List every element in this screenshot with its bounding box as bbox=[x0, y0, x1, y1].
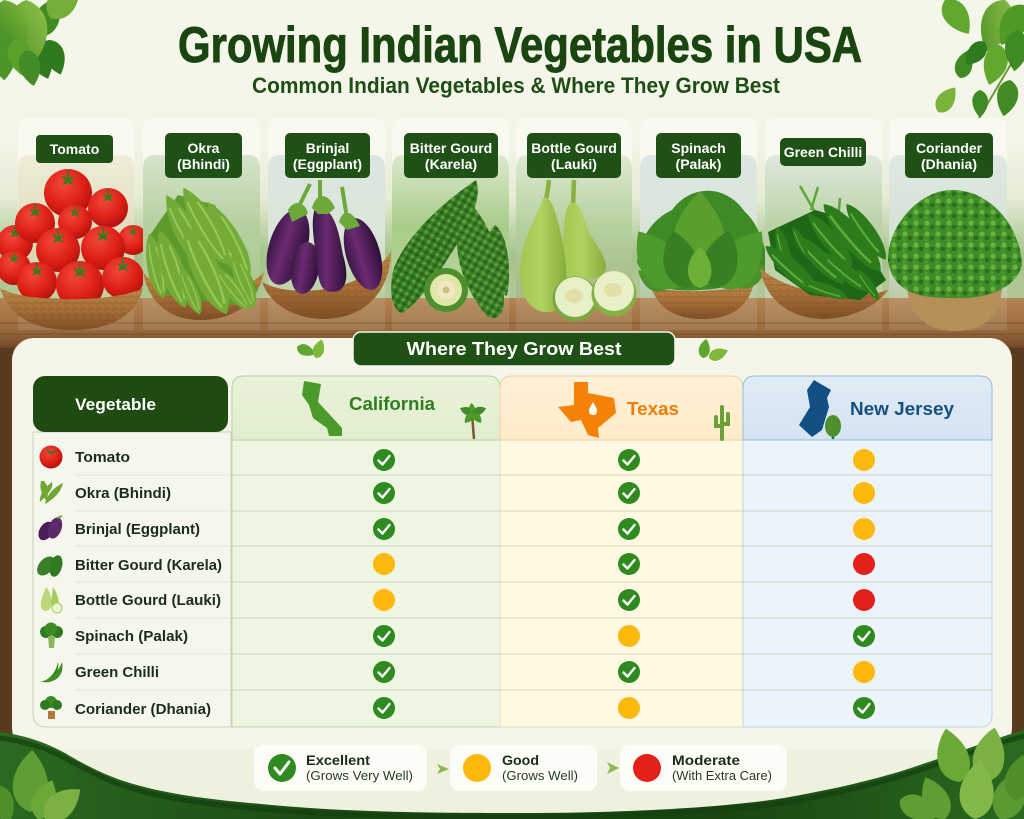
icon: coriander pot bbox=[888, 190, 1022, 331]
row label: Okra: Okra (Bhindi) bbox=[75, 486, 171, 502]
row label: Bottle Gourd bbox=[41, 587, 221, 613]
row label: Green Chilli: Green Chilli bbox=[75, 665, 159, 681]
heading: New Jersey: New Jersey bbox=[850, 399, 954, 419]
panel: spinach card bbox=[622, 118, 777, 330]
ratings: California bbox=[373, 449, 395, 719]
legend bbox=[254, 745, 787, 791]
panel: brinjal card bbox=[258, 118, 391, 330]
row label: Tomato bbox=[40, 446, 130, 468]
icon: bottom-left leaves bbox=[0, 749, 88, 819]
icon: okra basket bbox=[140, 181, 264, 320]
panel: vegetable column bbox=[33, 376, 231, 727]
icon: bottom-right leaves bbox=[895, 725, 1024, 819]
row label: Okra bbox=[40, 481, 171, 504]
row label: Coriander bbox=[40, 696, 211, 719]
bottom green wave bbox=[0, 730, 1024, 819]
panel: tomato card bbox=[0, 118, 148, 330]
label: Bitter Gourd bbox=[404, 133, 498, 178]
icon: California map bbox=[302, 381, 342, 436]
row label: Bottle Gourd: Bottle Gourd (Lauki) bbox=[75, 593, 221, 609]
icon: palm tree bbox=[459, 403, 487, 439]
label: Bottle Gourd bbox=[527, 133, 621, 178]
legend item: Excellent: (Grows Very Well) bbox=[306, 769, 413, 783]
legend item: Excellent: Excellent bbox=[306, 752, 370, 768]
label: Brinjal bbox=[285, 133, 370, 178]
panel: coriander card bbox=[888, 118, 1022, 331]
label: Bitter Gourd: (Karela) bbox=[425, 156, 477, 172]
heading banner: Where They Grow Best: Where They Grow Best bbox=[406, 338, 622, 359]
ratings: Texas bbox=[618, 449, 640, 719]
row label: Bitter Gourd: Bitter Gourd (Karela) bbox=[75, 558, 222, 574]
label: Brinjal: Brinjal bbox=[306, 140, 349, 156]
icon: tomato basket bbox=[0, 169, 148, 330]
panel: green chilli card bbox=[760, 118, 893, 330]
icon: top-right leaves bbox=[931, 0, 1024, 125]
label: Tomato bbox=[36, 135, 113, 163]
row label: Spinach: Spinach (Palak) bbox=[75, 629, 188, 645]
panel: okra card bbox=[140, 118, 264, 330]
legend item: Excellent bbox=[254, 745, 427, 791]
label: Coriander: (Dhania) bbox=[921, 156, 977, 172]
icon: cactus bbox=[716, 407, 728, 439]
panel: bottle gourd card bbox=[516, 118, 636, 330]
panel: New Jersey column bbox=[743, 376, 992, 727]
icon: banner leaves left bbox=[295, 338, 327, 360]
legend item: Moderate: (With Extra Care) bbox=[672, 769, 772, 783]
icon: top-left leaves bbox=[0, 0, 90, 88]
row label: Green Chilli bbox=[40, 662, 159, 682]
row divider lines bbox=[232, 475, 992, 690]
label: Green Chilli: Green Chilli bbox=[784, 144, 862, 160]
arrow bbox=[437, 764, 449, 774]
row label: Brinjal bbox=[35, 515, 200, 543]
title: Growing Indian Vegetables in USA bbox=[178, 17, 862, 73]
label: Brinjal: (Eggplant) bbox=[293, 156, 362, 172]
icon: bitter gourd bbox=[391, 180, 509, 318]
heading: California: California bbox=[349, 394, 436, 414]
label: Coriander bbox=[905, 133, 993, 178]
icon: New Jersey map bbox=[799, 380, 831, 437]
heading: Vegetable: Vegetable bbox=[75, 396, 156, 414]
label: Bottle Gourd: Bottle Gourd bbox=[531, 140, 617, 156]
ratings: New Jersey bbox=[853, 449, 875, 719]
legend item: Good: (Grows Well) bbox=[502, 769, 578, 783]
label: Bitter Gourd: Bitter Gourd bbox=[410, 140, 492, 156]
heading: Vegetable bbox=[33, 376, 228, 432]
icon: brinjal basket bbox=[258, 180, 391, 319]
label: Okra: (Bhindi) bbox=[177, 156, 230, 172]
label: Okra: Okra bbox=[188, 140, 220, 156]
heading: Texas: Texas bbox=[627, 399, 679, 419]
icon: Texas marker bbox=[589, 402, 597, 415]
icon: chilli basket bbox=[760, 186, 893, 319]
label: Bottle Gourd: (Lauki) bbox=[551, 156, 597, 172]
label: Okra bbox=[165, 133, 242, 178]
label: Spinach bbox=[656, 133, 741, 178]
row label: Spinach bbox=[40, 622, 188, 648]
icon: spinach basket bbox=[622, 191, 777, 319]
legend item: Good: Good bbox=[502, 752, 539, 768]
subtitle: Common Indian Vegetables & Where They Grow Best bbox=[252, 73, 781, 98]
icon: bottle gourd bbox=[520, 180, 636, 322]
panel: California column bbox=[232, 376, 500, 727]
heading banner: Where They Grow Best bbox=[353, 332, 675, 366]
panel: bitter gourd card bbox=[391, 118, 509, 330]
legend item: Moderate: Moderate bbox=[672, 752, 740, 768]
label: Spinach: (Palak) bbox=[676, 156, 721, 172]
icon: banner leaves right bbox=[697, 338, 730, 363]
label: Spinach: Spinach bbox=[671, 140, 726, 156]
panel: table container bbox=[12, 338, 1012, 750]
row label: Bitter Gourd bbox=[34, 553, 222, 579]
panel: Texas column bbox=[500, 376, 743, 727]
background scene strip bbox=[0, 150, 1024, 738]
icon: tree bbox=[825, 415, 841, 439]
row label: Coriander: Coriander (Dhania) bbox=[75, 702, 211, 718]
icon: Texas map bbox=[558, 382, 616, 438]
legend item: Moderate bbox=[620, 745, 787, 791]
row label: Brinjal: Brinjal (Eggplant) bbox=[75, 522, 200, 538]
label: Tomato: Tomato bbox=[50, 141, 99, 157]
row label: Tomato: Tomato bbox=[75, 450, 130, 466]
label: Coriander: Coriander bbox=[916, 140, 983, 156]
label: Green Chilli bbox=[780, 138, 866, 166]
legend item: Good bbox=[450, 745, 597, 791]
arrow bbox=[607, 762, 619, 774]
